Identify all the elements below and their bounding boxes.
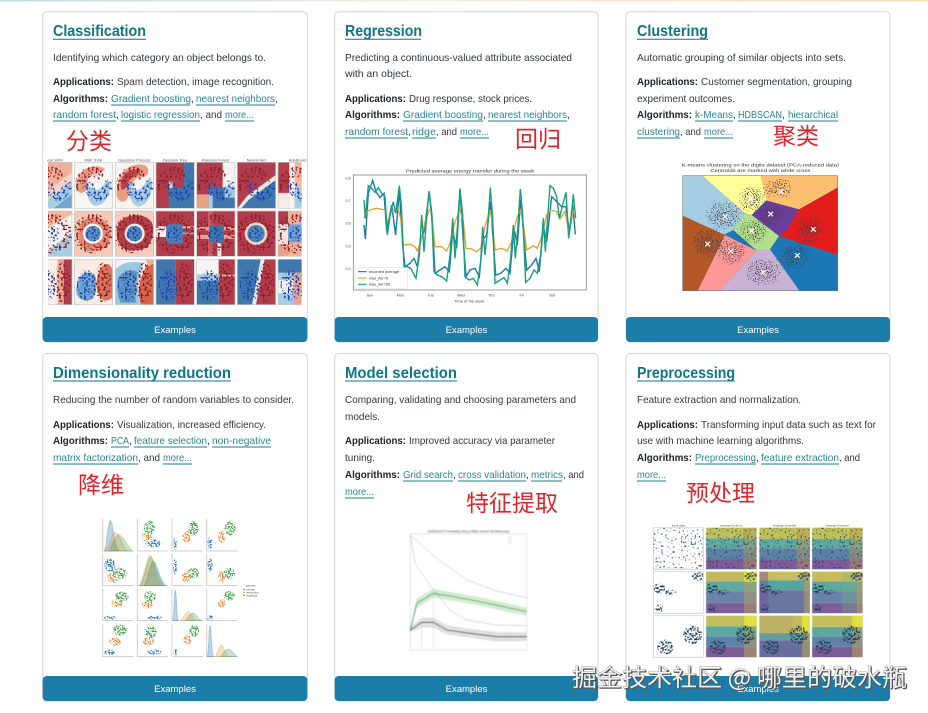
applications and algorithms text: Algorithms: — [637, 109, 692, 121]
panel borders — [48, 162, 302, 305]
legend: virginica — [246, 593, 257, 597]
applications and algorithms text: , — [453, 469, 456, 481]
y axis labels: 0.5 — [346, 244, 351, 248]
heading: Dimensionality reduction: Dimensionality reduction — [53, 365, 231, 382]
centroid crosses — [705, 189, 816, 275]
applications and algorithms text: Applications: — [53, 76, 114, 88]
applications and algorithms text: feature selection — [134, 435, 207, 447]
legend: versicolor — [246, 590, 259, 594]
x axis labels: Time of the week — [454, 298, 484, 303]
density curves — [104, 520, 237, 657]
top page strip — [0, 0, 928, 1]
applications and algorithms text: , — [207, 435, 210, 447]
applications and algorithms text: nearest neighbors — [196, 93, 275, 105]
row of moon decision surfaces — [39, 162, 313, 208]
applications and algorithms text: experiment outcomes. — [637, 93, 735, 105]
chart title: Centroids are marked with white cross — [710, 168, 810, 173]
plot frame — [353, 175, 586, 290]
panel: clustering card — [626, 12, 890, 342]
line: max_iter=5 — [364, 208, 573, 252]
applications and algorithms text: , and — [200, 109, 222, 121]
applications and algorithms text — [637, 419, 876, 481]
panel: preprocessing card — [626, 354, 890, 701]
applications and algorithms text: hierarchical — [788, 109, 838, 121]
series: versicolor points — [107, 531, 226, 646]
test accuracy curve — [410, 593, 527, 630]
button: Examples — [43, 317, 307, 342]
applications and algorithms text: , and — [680, 126, 701, 138]
row of circle decision surfaces — [37, 211, 312, 256]
column titles: strategy='uniform' — [720, 523, 743, 527]
red label: preprocessing: 预处理 — [686, 474, 755, 508]
applications and algorithms text — [345, 93, 570, 138]
card frame — [43, 354, 307, 701]
legend: max_iter=5 — [369, 276, 388, 280]
line: max_iter=50 — [364, 186, 576, 285]
chart: energy transfer line chart — [346, 168, 586, 303]
panel: regression card — [335, 12, 598, 342]
classifier titles: Random Forest — [202, 157, 230, 162]
test score curve — [410, 622, 527, 637]
row of linear decision surfaces — [36, 259, 315, 305]
button: Examples: Examples — [737, 325, 779, 336]
button: Examples — [626, 676, 890, 701]
legend — [355, 268, 408, 288]
applications and algorithms text: Transforming input data such as text for — [701, 419, 876, 431]
applications and algorithms text: Gradient boosting — [403, 109, 483, 121]
applications and algorithms text: more... — [345, 486, 374, 498]
applications and algorithms text: , — [129, 435, 132, 447]
applications and algorithms text — [53, 76, 278, 121]
applications and algorithms text: , — [526, 469, 529, 481]
applications and algorithms text: Gradient boosting — [111, 93, 191, 105]
legend — [507, 537, 512, 544]
classifier titles: AdaBoost — [289, 157, 307, 162]
middle row panels — [653, 572, 864, 613]
applications and algorithms text: random forest — [53, 109, 116, 121]
applications and algorithms text: , — [408, 126, 411, 138]
applications and algorithms text: cross validation — [458, 469, 526, 481]
applications and algorithms text: Algorithms: — [53, 435, 108, 447]
applications and algorithms text: Algorithms: — [53, 93, 108, 105]
chart title: Predicted average energy transfer during the week — [406, 168, 535, 173]
plot frame — [410, 534, 527, 650]
card frame — [626, 12, 890, 342]
heading: Classification: Classification — [53, 23, 146, 40]
button: Examples: Examples — [737, 684, 779, 695]
chart title — [682, 163, 840, 173]
description text: Automatic grouping of similar objects into sets. — [637, 52, 846, 64]
classifier titles: RBF SVM — [84, 157, 102, 162]
legend — [243, 583, 259, 597]
applications and algorithms text: Visualization, increased efficiency. — [117, 419, 266, 431]
applications and algorithms text: more... — [704, 126, 733, 138]
description text: models. — [345, 411, 380, 423]
button: Examples: Examples — [154, 325, 196, 336]
legend: species — [245, 583, 256, 587]
heading: Model selection: Model selection — [345, 365, 457, 382]
panel: dimensionality reduction card — [43, 354, 307, 701]
legend: max_iter=50 — [369, 283, 390, 287]
line: recorded average — [364, 180, 575, 277]
watermark: 掘金技术社区 @ 哪里的破水瓶 — [572, 658, 907, 693]
applications and algorithms text: Drug response, stock prices. — [409, 93, 532, 105]
applications and algorithms text: ridge — [412, 126, 436, 138]
applications and algorithms text: , — [733, 109, 736, 121]
chart: classifier comparison grid — [36, 157, 315, 305]
classifier titles: ear SVM — [47, 157, 63, 162]
applications and algorithms text: more... — [637, 469, 666, 481]
legend: recorded average — [369, 270, 399, 274]
card frame — [335, 354, 598, 701]
panel: model selection card — [335, 354, 598, 701]
description text: with an object. — [344, 68, 412, 80]
applications and algorithms text: Algorithms: — [345, 109, 400, 121]
scattered digit samples — [683, 174, 838, 291]
button: Examples — [335, 317, 598, 342]
red label: dimensionality reduction: 降维 — [78, 466, 124, 500]
card frame — [43, 12, 307, 342]
x axis labels: Fri — [520, 294, 524, 298]
button: Examples: Examples — [446, 684, 488, 695]
applications and algorithms text: , and — [436, 126, 457, 138]
y axis labels: 0.4 — [346, 267, 351, 271]
heading: Clustering: Clustering — [637, 23, 708, 40]
applications and algorithms text: , — [275, 93, 278, 105]
applications and algorithms text: Preprocessing — [695, 452, 756, 464]
applications and algorithms text: Applications: — [345, 435, 406, 447]
applications and algorithms text: more... — [163, 452, 192, 464]
red label: model selection: 特征提取 — [466, 484, 558, 518]
training curves — [410, 535, 527, 626]
description text — [344, 52, 572, 80]
applications and algorithms text: Applications: — [53, 419, 114, 431]
series: setosa points — [104, 537, 213, 655]
applications and algorithms text: logistic regression — [121, 109, 200, 121]
legend: setosa — [246, 587, 255, 591]
applications and algorithms text: , and — [839, 452, 860, 464]
applications and algorithms text: , — [782, 109, 785, 121]
bottom row panels — [653, 616, 863, 657]
applications and algorithms text: clustering — [637, 126, 680, 138]
button: Examples — [626, 317, 890, 342]
scatter points by species — [104, 521, 235, 655]
applications and algorithms text: more... — [225, 109, 254, 121]
applications and algorithms text: , — [191, 93, 194, 105]
applications and algorithms text: k-Means — [695, 109, 733, 121]
y axis labels: 0.7 — [346, 199, 351, 203]
applications and algorithms text: PCA — [111, 435, 129, 447]
column titles — [672, 523, 850, 527]
green band — [410, 589, 527, 632]
plot frame — [683, 176, 838, 291]
panel borders — [653, 528, 703, 657]
chart title: GridSearchCV evaluating using multiple scorers simultaneously — [427, 530, 509, 534]
button: Examples — [43, 676, 307, 701]
card frame — [626, 354, 890, 701]
heading: Regression: Regression — [345, 23, 422, 40]
x axis labels: Wed — [457, 294, 465, 298]
column titles: Input data — [672, 523, 685, 527]
applications and algorithms text: matrix factorization — [53, 452, 138, 464]
applications and algorithms text: Algorithms: — [345, 469, 400, 481]
chart: iris pair plot — [103, 519, 259, 657]
applications and algorithms text: , — [567, 109, 570, 121]
button: Examples: Examples — [446, 325, 488, 336]
applications and algorithms text: Spam detection, image recognition. — [117, 76, 274, 88]
applications and algorithms text: , — [116, 109, 119, 121]
applications and algorithms text: Applications: — [637, 419, 698, 431]
applications and algorithms text: , and — [138, 452, 160, 464]
best score markers — [422, 593, 433, 650]
applications and algorithms text: Algorithms: — [637, 452, 692, 464]
applications and algorithms text: Applications: — [345, 93, 406, 105]
applications and algorithms text: random forest — [345, 126, 408, 138]
red label: regression: 回归 — [515, 120, 561, 154]
description text: Predicting a continuous-valued attribute associated — [345, 52, 572, 64]
top row panels — [653, 528, 863, 569]
applications and algorithms text: Grid search — [403, 469, 453, 481]
panel: classification card — [36, 12, 315, 342]
x axis labels: Sat — [549, 294, 555, 298]
applications and algorithms text: Customer segmentation, grouping — [701, 76, 852, 88]
y axis labels — [346, 176, 351, 271]
description text: Comparing, validating and choosing parameters and — [345, 394, 576, 406]
chart: discretization grid — [653, 523, 864, 657]
column titles: strategy='kmeans' — [825, 523, 850, 527]
grey band — [410, 618, 527, 642]
chart title: K-means clustering on the digits dataset (PCA-reduced data) — [682, 163, 840, 168]
button: Examples: Examples — [154, 684, 196, 695]
classifier titles: Gaussian Process — [118, 157, 151, 162]
x axis labels — [367, 294, 555, 303]
applications and algorithms text: metrics — [531, 469, 563, 481]
applications and algorithms text: HDBSCAN — [738, 109, 782, 121]
pair plot axes — [103, 519, 237, 657]
description text — [345, 394, 576, 423]
chart: grid search scoring curves — [410, 530, 527, 650]
applications and algorithms text: , — [756, 452, 759, 464]
description text: Reducing the number of random variables to consider. — [53, 394, 294, 406]
classifier titles: Neural Net — [247, 157, 267, 162]
heading: Preprocessing: Preprocessing — [637, 365, 735, 382]
y axis labels: 0.6 — [346, 222, 351, 226]
applications and algorithms text: use with machine learning algorithms. — [637, 435, 804, 447]
applications and algorithms text — [53, 419, 271, 464]
chart: k-means voronoi map — [682, 163, 840, 291]
red label: clustering: 聚类 — [773, 117, 819, 151]
description text: Identifying which category an object belongs to. — [53, 52, 266, 64]
classifier titles: Decision Tree — [163, 157, 188, 162]
y axis labels: 0.8 — [346, 176, 351, 180]
classifier titles — [47, 157, 307, 162]
applications and algorithms text: tuning. — [345, 452, 375, 464]
x axis labels: Tue — [428, 294, 434, 298]
series: virginica points — [113, 521, 235, 638]
x axis labels: Thu — [488, 294, 494, 298]
button: Examples — [335, 676, 598, 701]
applications and algorithms text — [637, 76, 852, 138]
card frame — [335, 12, 598, 342]
applications and algorithms text: Improved accuracy via parameter — [409, 435, 555, 447]
voronoi regions — [683, 176, 838, 291]
x axis labels: Mon — [397, 294, 404, 298]
applications and algorithms text: , — [483, 109, 486, 121]
applications and algorithms text: , and — [563, 469, 584, 481]
applications and algorithms text: more... — [460, 126, 489, 138]
applications and algorithms text: non-negative — [212, 435, 271, 447]
applications and algorithms text: Applications: — [637, 76, 698, 88]
applications and algorithms text: feature extraction — [761, 452, 839, 464]
description text: Feature extraction and normalization. — [637, 394, 801, 406]
applications and algorithms text: nearest neighbors — [488, 109, 567, 121]
x axis labels: Sun — [367, 294, 373, 298]
applications and algorithms text — [345, 435, 584, 498]
red label: classification: 分类 — [66, 122, 112, 156]
column titles: strategy='quantile' — [773, 523, 797, 527]
